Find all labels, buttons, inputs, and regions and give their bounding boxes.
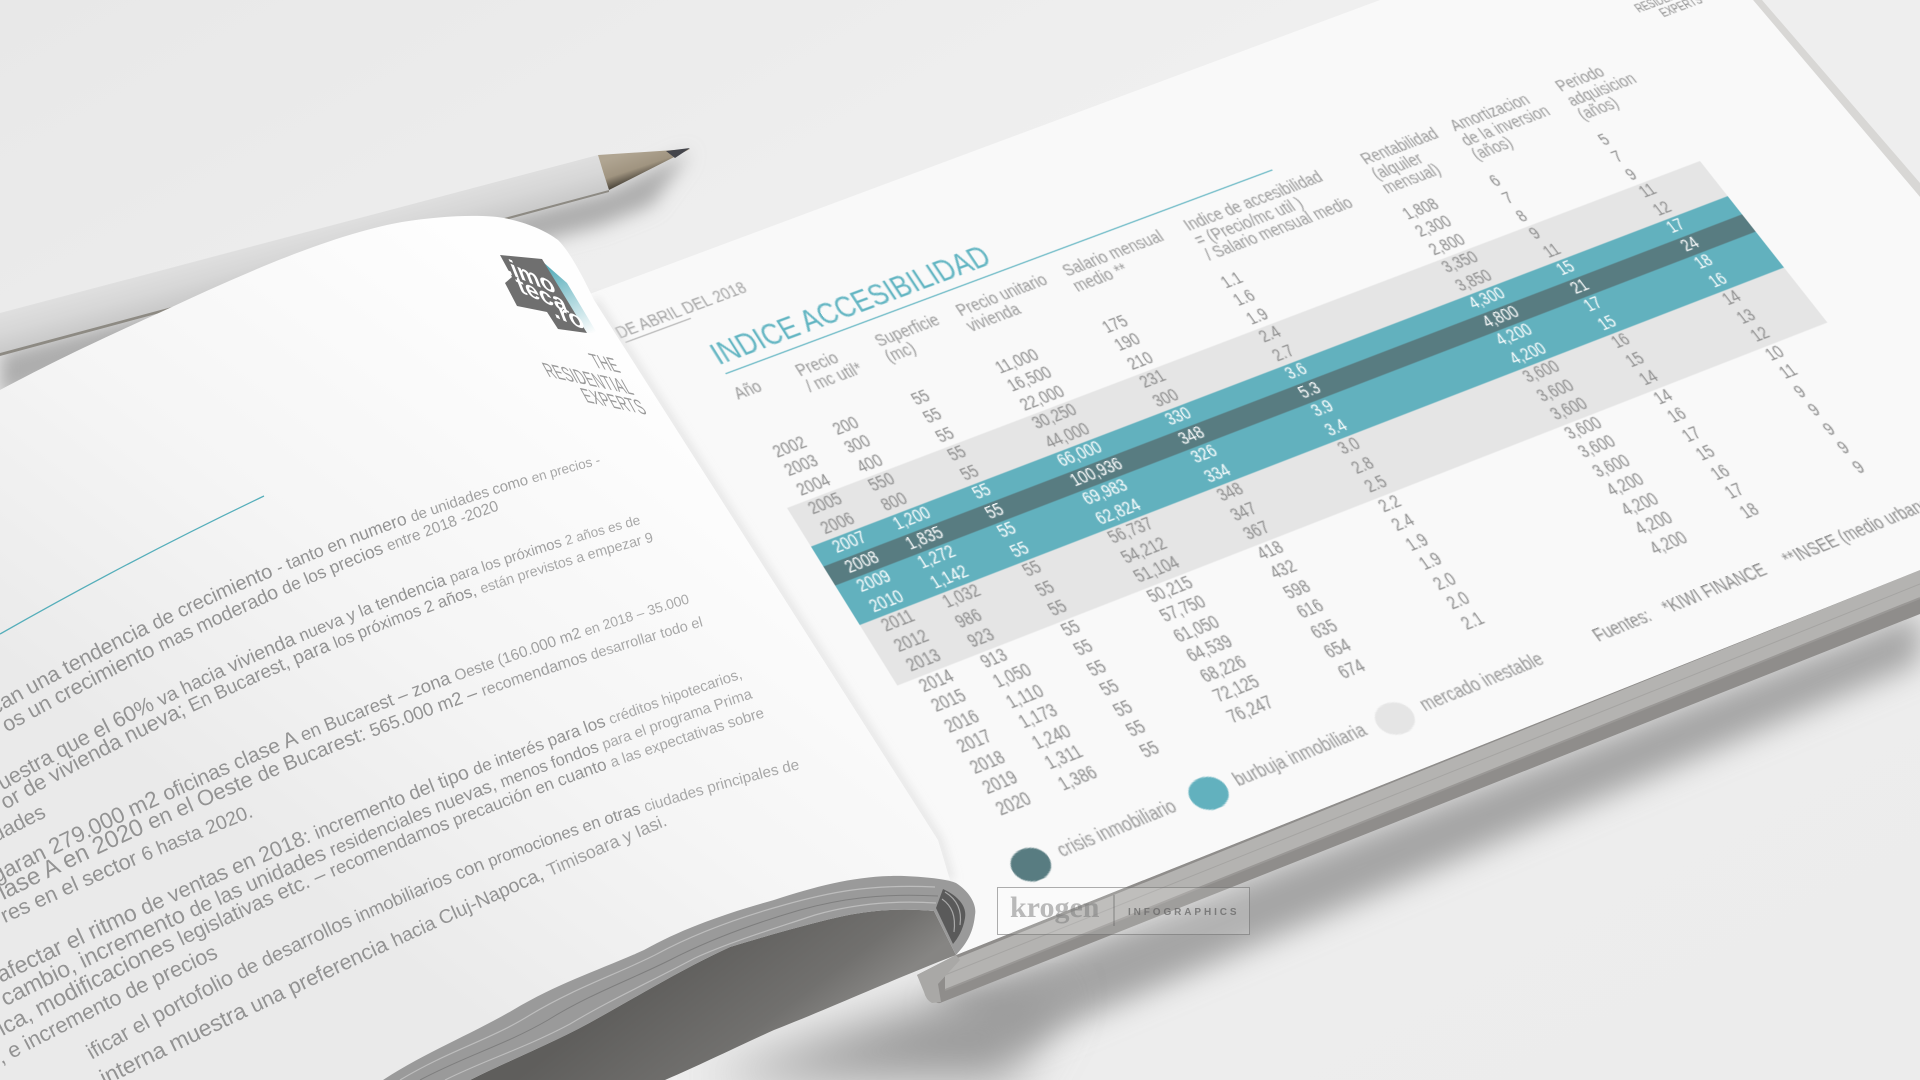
- column: precio mc: 800: [877, 489, 911, 515]
- legend label: burbuja: burbuja inmobiliaria: [1228, 719, 1372, 791]
- column: superficie: 55: [1136, 737, 1164, 762]
- column: rentabilidad: 3,850: [1451, 266, 1496, 295]
- header: periodo: [1551, 62, 1640, 124]
- column: periodo: 7: [1608, 148, 1627, 167]
- left page body text: or de vivienda nueva; En Bucarest, para los próximos 2 años, están previstos a empezar 9: [2, 532, 652, 808]
- column: amortizacion: 16: [1607, 330, 1635, 353]
- column: precio unitario: 69,983: [1079, 476, 1132, 510]
- column: precio mc: 400: [853, 451, 887, 477]
- gutter shadow on right page: [594, 300, 950, 880]
- column: precio mc: 550: [865, 470, 899, 496]
- column: precio unitario: 76,247: [1223, 692, 1278, 728]
- column: superficie: 55: [1044, 597, 1072, 621]
- column: amortizacion: 6: [1485, 172, 1505, 190]
- left page body text: can una tendencia de crecimiento - tanto en numero de unidades como en precios -: [0, 460, 600, 712]
- column: precio mc: 923: [964, 625, 999, 652]
- column: periodo: 12: [1747, 324, 1774, 346]
- book shadow on desk: [700, 612, 1920, 1080]
- column: rentabilidad: 3,600: [1560, 413, 1606, 443]
- column: indice: 1.9: [1415, 549, 1447, 575]
- column: salario: 300: [1149, 385, 1183, 411]
- column: salario: 210: [1123, 348, 1157, 374]
- left page: [0, 216, 950, 1080]
- column: superficie: 55: [1006, 538, 1033, 562]
- column: amortizacion: [1485, 172, 1763, 523]
- header: amortizacion: [1446, 90, 1554, 164]
- column: indice: 2.7: [1268, 341, 1299, 365]
- column: años: 2017: [953, 726, 996, 758]
- logo: imoteca.ro: teca: [511, 270, 572, 319]
- column: periodo: 11: [1635, 181, 1661, 202]
- left page body text: ificar el portofolio de desarrollos inmobiliarios con promociones en otras ciudades principales de: [85, 760, 799, 1059]
- column: precio unitario: 16,500: [1004, 363, 1056, 396]
- column: amortizacion: 9: [1525, 225, 1545, 244]
- column: periodo: 13: [1732, 306, 1760, 328]
- column: superficie: 55: [1096, 676, 1124, 701]
- column: indice: 2.5: [1361, 472, 1392, 497]
- column: superficie: 55: [1070, 636, 1097, 661]
- column: salario: 190: [1111, 330, 1145, 355]
- column: amortizacion: 15: [1552, 258, 1579, 280]
- column: salario: 418: [1253, 537, 1288, 564]
- column: periodo: 9: [1848, 457, 1869, 478]
- source: kiwi: *KIWI FINANCE: [1657, 559, 1772, 619]
- column: indice: 2.1: [1457, 608, 1489, 634]
- header: amortizacion: Amortizacion: [1446, 90, 1534, 135]
- header: rentabilidad: (alquiler: [1367, 149, 1427, 183]
- column: superficie: [908, 386, 1164, 762]
- title: INDICE ACCESIBILIDAD: [703, 239, 997, 371]
- column: indice: 2.0: [1429, 569, 1461, 594]
- date underline: [625, 318, 691, 343]
- column: periodo: 9: [1804, 401, 1825, 421]
- column: salario: 334: [1200, 461, 1235, 487]
- column: periodo: 9: [1834, 438, 1854, 459]
- header: rentabilidad: Rentabilidad: [1356, 124, 1443, 169]
- band: crisis inmobiliario: [823, 214, 1756, 586]
- column: precio unitario: 44,000: [1041, 419, 1094, 452]
- column: rentabilidad: 4,200: [1645, 528, 1692, 559]
- left page body text: afectar el ritmo de ventas en 2018: incremento del tipo de interés para los créditos hipotecarios,: [0, 672, 742, 982]
- column: indice: 5.3: [1294, 378, 1325, 402]
- left page body text: garan 279.000 m2 oficinas clase A en Bucarest – zona Oeste (160.000 m2 en 2018 – 35.000: [0, 594, 688, 886]
- column: precio unitario: 51,104: [1130, 553, 1184, 587]
- logo: imoteca.ro: .imo: [498, 251, 560, 300]
- column: rentabilidad: 4,200: [1505, 339, 1551, 368]
- column: amortizacion: 21: [1566, 276, 1593, 298]
- column: amortizacion: 15: [1621, 349, 1649, 371]
- column: años: [769, 433, 1035, 820]
- column: años: 2003: [781, 452, 822, 481]
- column: años: 2007: [829, 528, 871, 558]
- column: superficie: 55: [920, 405, 946, 428]
- column: rentabilidad: 4,200: [1631, 508, 1677, 539]
- column: periodo: 9: [1790, 382, 1810, 402]
- column: superficie: 55: [981, 500, 1008, 523]
- title underline: [725, 169, 1272, 374]
- column: salario: 616: [1293, 596, 1328, 623]
- column: precio unitario: 50,215: [1143, 573, 1197, 607]
- column: superficie: 55: [1032, 577, 1059, 601]
- column: salario: 330: [1161, 404, 1196, 430]
- column: salario: 635: [1306, 616, 1342, 643]
- column: superficie: 55: [944, 443, 971, 466]
- left page body text: cambio, incremento de las unidades residenciales nuevas, menos fondos para el programa Prima: [2, 691, 753, 1004]
- column: superficie: 55: [908, 386, 934, 409]
- column: salario: 348: [1174, 423, 1209, 449]
- column: periodo: 5: [1594, 131, 1614, 149]
- column: salario: 231: [1136, 367, 1170, 392]
- header: precio unitario: Precio unitario: [952, 270, 1052, 321]
- header: precio unitario: vivienda: [962, 299, 1024, 336]
- column: rentabilidad: 3,600: [1588, 451, 1634, 481]
- column: rentabilidad: 2,800: [1425, 230, 1469, 259]
- header: rentabilidad: mensual): [1378, 160, 1445, 198]
- column: periodo: 14: [1718, 287, 1746, 310]
- column: precio mc: 300: [841, 432, 875, 458]
- column: precio mc: [829, 413, 1101, 795]
- column: precio unitario: 11,000: [991, 345, 1043, 377]
- column: precio unitario: 66,000: [1053, 438, 1106, 471]
- column: periodo: 10: [1761, 342, 1789, 365]
- column: periodo: 12: [1649, 198, 1676, 220]
- column: años: 2002: [769, 433, 810, 462]
- column: indice: 2.2: [1374, 491, 1405, 516]
- header: salario: Salario mensual: [1058, 227, 1168, 281]
- pencil: [0, 148, 690, 356]
- column: periodo: 18: [1690, 251, 1717, 273]
- header: indice: Indice de accesibilidad: [1180, 167, 1327, 235]
- logo tagline: RESIDENTIAL: [538, 358, 638, 400]
- watermark: krogen infographics: INFOGRAPHICS: [1128, 907, 1239, 918]
- column: superficie: 55: [1109, 697, 1137, 721]
- column: años: 2010: [865, 586, 908, 616]
- pencil shadow: [0, 152, 690, 398]
- column: precio mc: 1,272: [914, 542, 960, 573]
- header: precio mc util: [792, 348, 866, 396]
- left page body text: [0, 460, 799, 1080]
- column: años: 2016: [940, 706, 983, 737]
- legend label: crisis: crisis inmobiliario: [1052, 795, 1181, 862]
- column: periodo: 16: [1704, 269, 1731, 291]
- column: rentabilidad: 4,800: [1478, 302, 1523, 332]
- column: amortizacion: 14: [1649, 386, 1677, 408]
- logo tagline: [538, 349, 651, 420]
- column: indice: 1.1: [1217, 269, 1247, 292]
- column: amortizacion: 14: [1635, 367, 1663, 390]
- logo tagline: THE: [585, 349, 625, 378]
- column: rentabilidad: 4,200: [1492, 321, 1537, 350]
- column: superficie: 55: [1019, 558, 1046, 581]
- column: precio mc: 1,142: [926, 562, 972, 593]
- column: salario: 347: [1226, 499, 1261, 525]
- column: precio unitario: 61,050: [1169, 612, 1224, 647]
- column: amortizacion: 17: [1721, 480, 1749, 503]
- column: años: 2019: [979, 767, 1022, 799]
- column: periodo: 9: [1621, 165, 1641, 184]
- column: rentabilidad: [1398, 195, 1692, 559]
- spine foot: [917, 955, 960, 1003]
- watermark: krogen infographics: [998, 888, 1250, 934]
- column: amortizacion: 17: [1678, 423, 1705, 446]
- column: salario: 598: [1279, 576, 1315, 603]
- column: rentabilidad: 3,350: [1438, 248, 1483, 277]
- column: superficie: 55: [994, 519, 1021, 542]
- column: indice: 3.6: [1281, 360, 1312, 384]
- column: amortizacion: 17: [1580, 294, 1607, 316]
- column: salario: 348: [1213, 480, 1248, 506]
- column: rentabilidad: 2,300: [1412, 213, 1456, 241]
- column: años: 2006: [817, 509, 858, 538]
- column: salario: 367: [1239, 518, 1274, 544]
- column: años: 2014: [915, 666, 958, 696]
- header: amortizacion: (años): [1467, 133, 1518, 164]
- column: precio unitario: 54,212: [1117, 534, 1171, 568]
- column: años: 2008: [841, 547, 883, 577]
- column: años: 2004: [793, 471, 834, 500]
- column: años: 2013: [902, 646, 945, 676]
- column: rentabilidad: 4,200: [1602, 470, 1649, 501]
- column: indice: 1.9: [1401, 530, 1433, 555]
- logo tagline: EXPERTS: [576, 384, 651, 420]
- header: salario: medio **: [1068, 259, 1132, 296]
- column: amortizacion: 18: [1735, 499, 1763, 523]
- column: periodo: [1594, 131, 1869, 478]
- book cover edge: [917, 570, 1920, 1003]
- column: precio unitario: 56,737: [1104, 514, 1158, 548]
- column: precio mc: 1,032: [939, 581, 985, 613]
- column: amortizacion: 7: [1499, 189, 1518, 208]
- column: periodo: 17: [1663, 216, 1689, 237]
- column: precio mc: 1,240: [1028, 721, 1075, 754]
- column: precio unitario: [991, 345, 1278, 728]
- column: salario: 326: [1187, 442, 1222, 468]
- column: precio unitario: 30,250: [1028, 401, 1081, 433]
- column: años: 2015: [928, 686, 971, 717]
- column: superficie: 55: [956, 461, 983, 485]
- column: rentabilidad: 3,600: [1519, 357, 1564, 387]
- header: amortizacion: de la inversion: [1456, 101, 1554, 150]
- column: amortizacion: 11: [1539, 240, 1565, 262]
- column: años: 2005: [805, 490, 846, 519]
- date: 30 DE ABRIL DEL 2018: [592, 278, 751, 350]
- column: superficie: 55: [1057, 616, 1084, 641]
- column: precio mc: 1,386: [1054, 762, 1101, 795]
- teal accent line: [0, 496, 264, 634]
- column: precio mc: 1,050: [989, 660, 1036, 692]
- column: rentabilidad: 1,808: [1398, 195, 1443, 223]
- column: indice: 2.4: [1388, 511, 1419, 536]
- column: años: 2011: [878, 606, 919, 636]
- inside back cover: [470, 910, 956, 1080]
- left page body text: uestra que el 60% va hacia vivienda nueva y la tendencia para los próximos 2 años es de: [0, 516, 640, 789]
- column: precio mc: 1,200: [889, 504, 935, 534]
- header: indice: = (Precio/mc util ): [1190, 193, 1308, 250]
- column: precio unitario: 72,125: [1209, 672, 1264, 707]
- right page content in perspective: [592, 0, 1920, 883]
- right page: [560, 0, 1920, 955]
- column: amortizacion: 16: [1663, 404, 1691, 427]
- header: indice: / Salario mensual medio: [1200, 193, 1357, 265]
- column: indice: [1217, 269, 1489, 634]
- sources label: Fuentes:: [1588, 605, 1657, 646]
- column: precio unitario: 68,226: [1196, 652, 1251, 687]
- header: superficie: Superficie: [871, 310, 944, 351]
- column: precio mc: 1,835: [901, 523, 947, 554]
- column: amortizacion: 15: [1692, 442, 1720, 465]
- header: indice: [1180, 167, 1357, 265]
- legend label: mercado: mercado inestable: [1415, 648, 1549, 716]
- column: años: 2009: [853, 567, 895, 597]
- header: superficie: (mc): [880, 338, 920, 366]
- column: rentabilidad: 3,600: [1546, 394, 1592, 424]
- band: mercado inestable: [787, 161, 1827, 685]
- column: precio unitario: 100,936: [1066, 454, 1127, 490]
- column: periodo: 9: [1819, 419, 1840, 440]
- column: rentabilidad: 4,200: [1617, 489, 1663, 520]
- column: amortizacion: 8: [1512, 207, 1531, 226]
- legend dot: burbuja: [1181, 772, 1235, 815]
- column: años: 2012: [890, 626, 933, 656]
- header: periodo: adquisicion: [1562, 69, 1640, 110]
- column: precio unitario: 62,824: [1091, 495, 1145, 529]
- column: salario: 674: [1334, 656, 1369, 683]
- left page body text: lase A en 2020 en el Oeste de Bucarest: 565.000 m2 – recomendamos desarrollar todo el: [0, 616, 702, 900]
- running head: [1633, 0, 1706, 20]
- column: indice: 2.0: [1443, 589, 1475, 614]
- column: precio mc: 1,173: [1015, 701, 1062, 733]
- column: precio mc: 1,311: [1041, 742, 1087, 774]
- column: precio unitario: 22,000: [1016, 382, 1069, 415]
- column: superficie: 55: [932, 424, 958, 447]
- column: salario: 432: [1266, 557, 1301, 584]
- legend dot: mercado: [1368, 697, 1422, 739]
- left page body text: ica, modificaciones legislativas etc. – recomendamos precaución en cuanto a las expectativas sobre: [0, 710, 764, 1036]
- header: periodo: (años): [1573, 94, 1623, 124]
- column: rentabilidad: 3,600: [1574, 432, 1620, 462]
- column: amortizacion: 16: [1706, 461, 1734, 484]
- column: precio unitario: 64,539: [1183, 632, 1237, 667]
- column: indice: 1.6: [1230, 287, 1260, 310]
- page stack curl: [383, 876, 975, 1080]
- header: periodo: Periodo: [1551, 62, 1609, 96]
- column: salario: 175: [1098, 312, 1132, 337]
- column: indice: 3.9: [1307, 397, 1338, 421]
- column: años: 2018: [966, 747, 1009, 778]
- column: periodo: 24: [1676, 233, 1703, 255]
- column: periodo: 11: [1775, 361, 1802, 383]
- column: rentabilidad: 3,600: [1533, 376, 1578, 406]
- right page rim: [1753, 0, 1920, 197]
- left page body text: res en el sector 6 hasta 2020.: [1, 808, 252, 922]
- column: superficie: 55: [1122, 717, 1150, 742]
- column: indice: 3.0: [1334, 434, 1365, 459]
- column: superficie: 55: [969, 480, 995, 504]
- header: precio mc util: Precio: [792, 348, 843, 381]
- column: precio mc: 913: [976, 645, 1011, 672]
- column: años: 2020: [992, 788, 1035, 820]
- column: indice: 2.4: [1255, 323, 1286, 347]
- column: rentabilidad: 4,300: [1465, 284, 1510, 313]
- column: amortizacion: 15: [1594, 312, 1621, 334]
- watermark: krogen infographics: krogen: [1010, 891, 1100, 924]
- logo: imoteca.ro: [498, 251, 597, 336]
- logo: imoteca.ro: .ro: [546, 295, 589, 336]
- column: salario: 654: [1320, 636, 1356, 663]
- band: burbuja inmobiliaria: [811, 196, 1784, 625]
- legend dot: crisis: [1004, 842, 1058, 886]
- column: precio unitario: 57,750: [1156, 592, 1210, 627]
- header: precio mc util: / mc util*: [801, 358, 866, 396]
- column: indice: 2.8: [1347, 453, 1378, 478]
- header: rentabilidad: [1356, 124, 1445, 198]
- column: precio mc: 986: [951, 605, 986, 632]
- column: precio mc: 1,110: [1002, 681, 1048, 713]
- header: año: Año: [730, 377, 766, 404]
- column: superficie: 55: [1083, 656, 1111, 681]
- column: indice: 3.4: [1321, 416, 1351, 440]
- column: salario: [1098, 312, 1369, 683]
- left page body text: os un crecimiento mas moderado de los precios entre 2018 -2020: [4, 501, 498, 731]
- column: indice: 1.9: [1242, 305, 1273, 328]
- column: precio mc: 200: [829, 413, 863, 439]
